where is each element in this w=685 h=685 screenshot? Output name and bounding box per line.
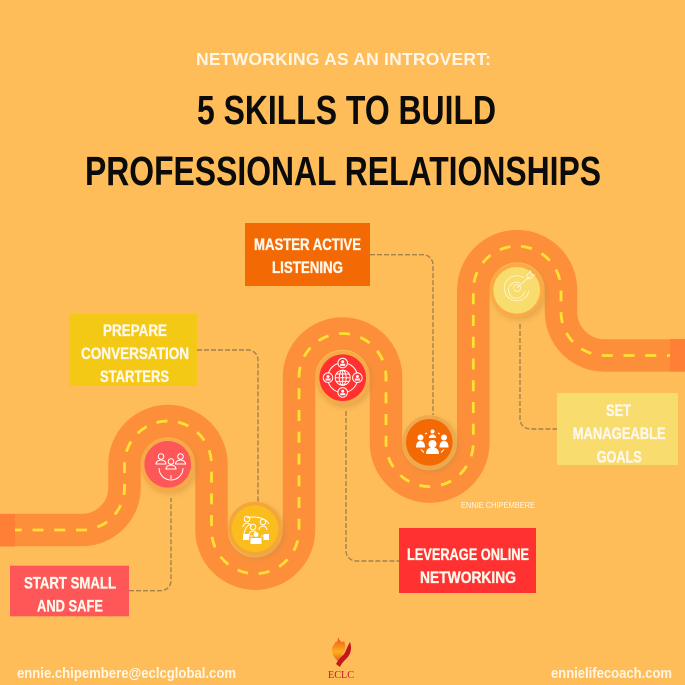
box: set manageable goals: GOALS — [597, 449, 642, 467]
box: master active listening: MASTER ACTIVE — [254, 236, 361, 254]
box: master active listening — [245, 223, 370, 286]
icon: global network circle — [316, 351, 372, 408]
box: set manageable goals — [557, 393, 678, 467]
footer email: ennie.chipembere@eclcglobal.com — [17, 666, 236, 682]
icon: target circle — [490, 263, 546, 320]
connector: online networking — [346, 411, 399, 561]
box: start small and safe — [10, 566, 129, 616]
connector: manageable goals — [520, 324, 557, 429]
box: set manageable goals: SET — [606, 402, 631, 420]
winding road — [0, 246, 685, 574]
subtitle: NETWORKING AS AN INTROVERT: — [196, 49, 491, 69]
title — [85, 87, 601, 194]
title: 5 SKILLS TO BUILD — [197, 87, 496, 133]
box: master active listening: LISTENING — [272, 259, 343, 277]
box: leverage online networking — [399, 528, 536, 593]
box: prepare conversation starters: CONVERSATION — [81, 345, 189, 363]
icon: small group circle — [141, 437, 197, 494]
logo: ECLC — [328, 637, 354, 681]
logo: ECLC: ECLC — [328, 670, 354, 681]
connector: active listening — [370, 255, 433, 415]
footer website: ennielifecoach.com — [551, 666, 672, 682]
box: prepare conversation starters: PREPARE — [103, 322, 167, 340]
box: start small and safe: START SMALL — [24, 574, 116, 592]
box: prepare conversation starters — [69, 314, 197, 386]
credit: ENNIE CHIPEMBERE — [461, 500, 535, 510]
icon: team circle — [402, 415, 458, 472]
box: start small and safe: AND SAFE — [37, 598, 103, 616]
box: leverage online networking: NETWORKING — [420, 569, 516, 587]
box: leverage online networking: LEVERAGE ONLINE — [407, 546, 529, 564]
connector: start small — [129, 498, 171, 591]
icon: group network circle — [228, 502, 284, 558]
box: prepare conversation starters: STARTERS — [100, 368, 169, 386]
connector: prepare starters — [197, 350, 258, 502]
